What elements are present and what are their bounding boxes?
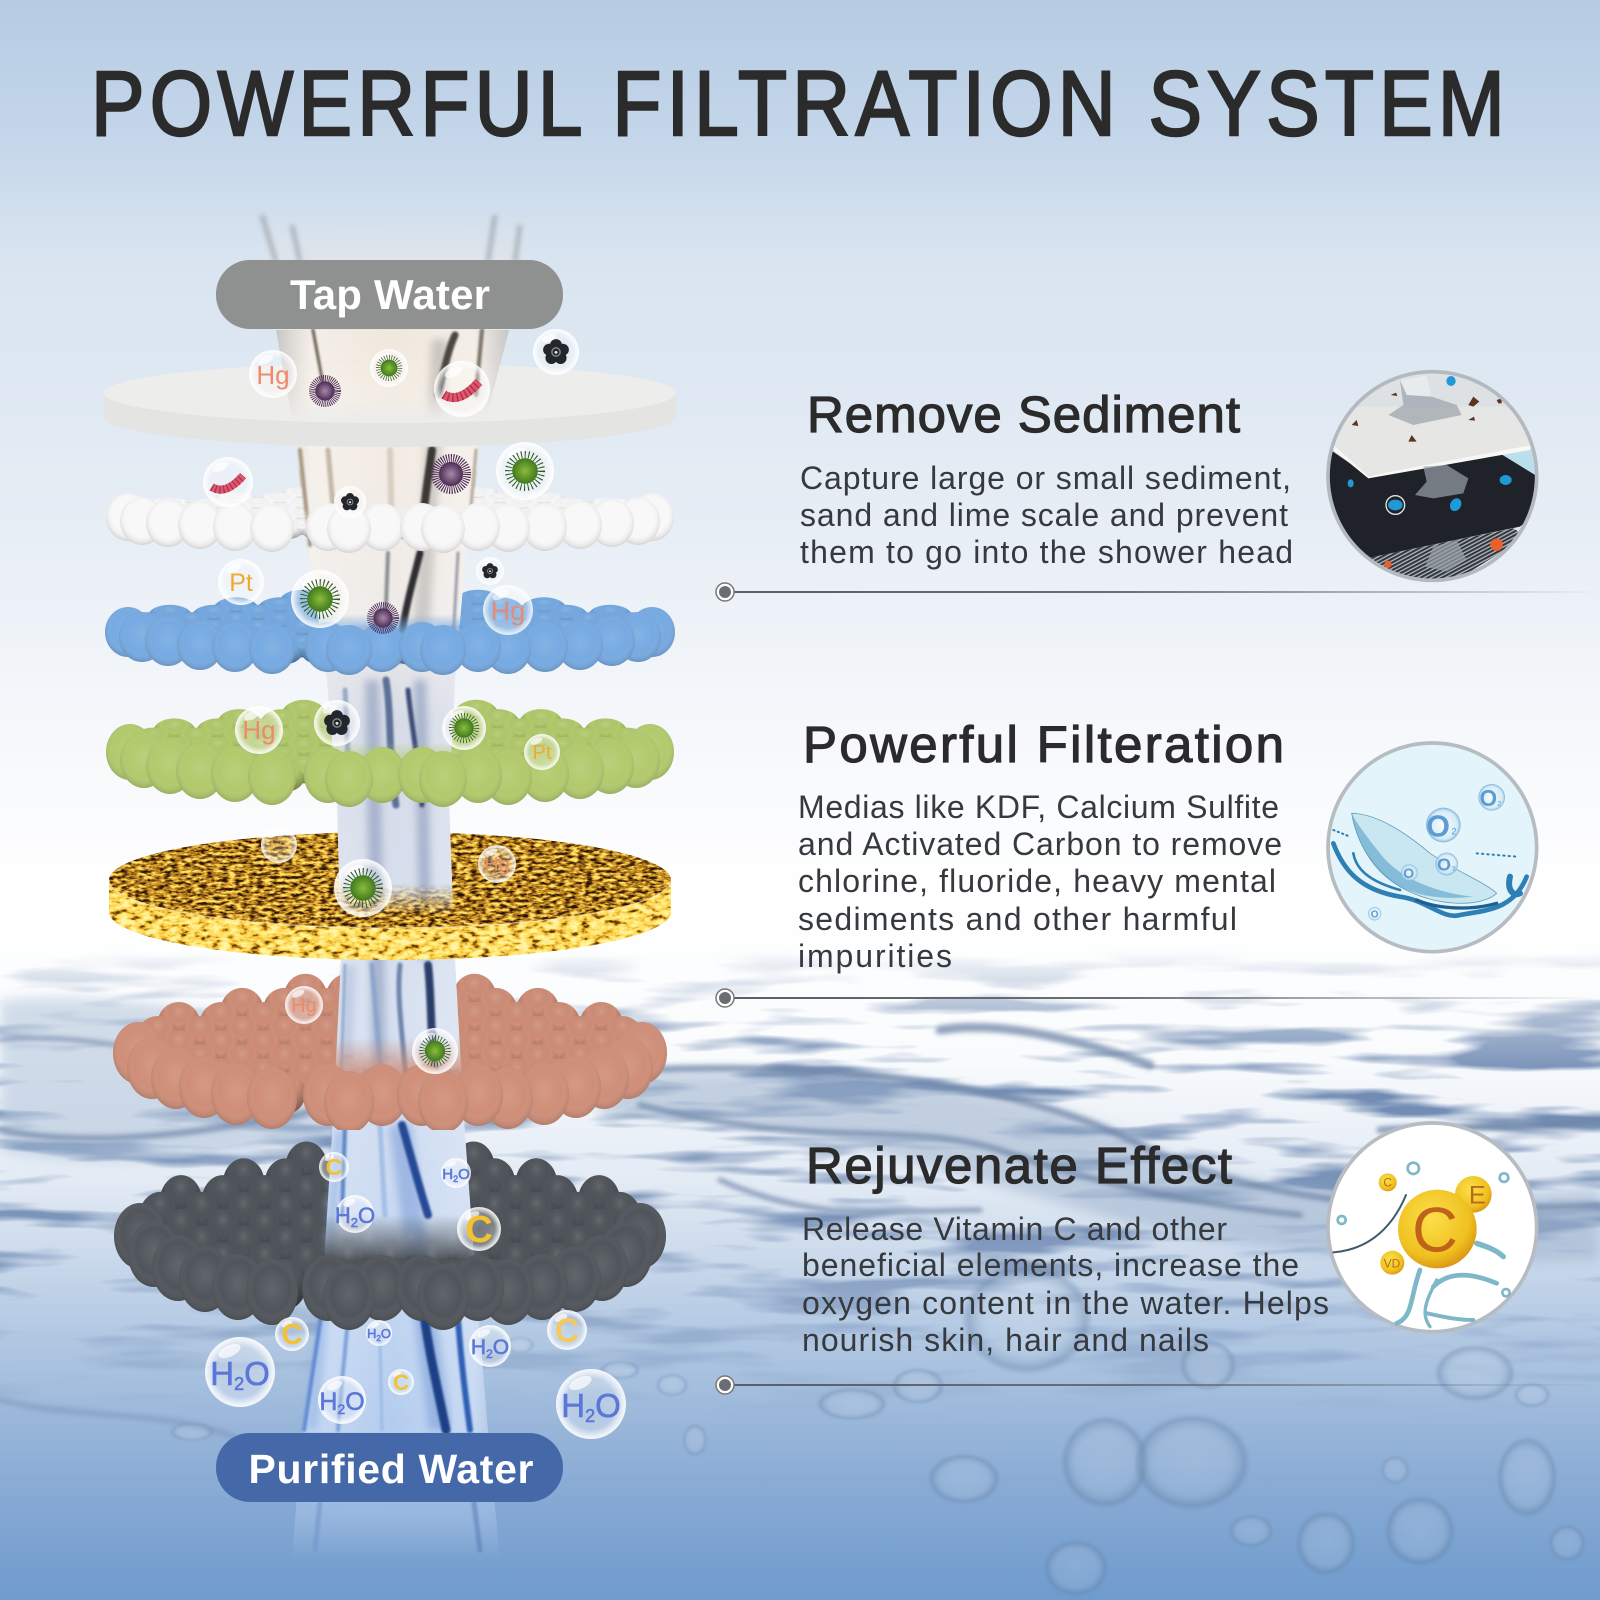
- icon: contact lens with oxygen bubbles: [1328, 743, 1537, 952]
- mineral and water molecule bubbles: 2: [376, 1334, 381, 1343]
- panel: rejuvenate effect: [716, 1123, 1600, 1394]
- mineral and water molecule bubbles: H: [561, 1387, 585, 1424]
- mineral and water molecule bubbles: 2: [337, 1401, 345, 1417]
- contaminant bubbles: Hg: [242, 715, 276, 745]
- mineral and water molecule bubbles: O: [345, 1388, 365, 1416]
- text block: powerful filteration description: [798, 789, 1282, 974]
- water stream: [262, 215, 530, 1560]
- label: purified water: [216, 1433, 563, 1502]
- mineral and water molecule bubbles: O: [381, 1326, 391, 1341]
- contaminant bubbles: [203, 329, 579, 1074]
- text block: remove sediment description: them to go into the shower head: [800, 534, 1293, 570]
- mineral and water molecule bubbles: 2: [351, 1215, 358, 1230]
- heading: rejuvenate effect: Rejuvenate Effect: [806, 1137, 1232, 1194]
- divider with marker: [716, 583, 1600, 601]
- heading: remove sediment: Remove Sediment: [807, 386, 1240, 443]
- water surface waves and bubbles: [0, 950, 1600, 1596]
- icon: contact lens with oxygen bubbles: O: [1437, 855, 1451, 875]
- filter layer 3: blue beads: [105, 215, 675, 1560]
- contaminant bubbles: Hg: [491, 596, 525, 626]
- panel: remove sediment: [716, 370, 1600, 601]
- mineral and water molecule bubbles: H: [442, 1166, 453, 1183]
- contaminant bubbles: Pt: [229, 569, 253, 597]
- mineral and water molecule bubbles: 2: [453, 1174, 458, 1184]
- contaminant bubbles: Pt: [533, 742, 552, 764]
- filter layer 1: white cotton disc: [104, 215, 676, 1560]
- label: tap water: [216, 260, 563, 329]
- heading: powerful filteration: Powerful Filteration: [803, 716, 1284, 773]
- icon: filter layers with sediment: [1327, 370, 1540, 590]
- mineral and water molecule bubbles: C: [555, 1312, 579, 1350]
- label: tap water: Tap Water: [290, 271, 490, 318]
- icon: contact lens with oxygen bubbles: 2: [1451, 826, 1457, 836]
- mineral and water molecule bubbles: O: [458, 1166, 470, 1183]
- icon: contact lens with oxygen bubbles: O: [1371, 909, 1379, 920]
- divider with marker: [716, 1376, 1600, 1394]
- filter layer 2: white beads: [106, 215, 674, 1560]
- text block: rejuvenate effect description: beneficial elements, increase the: [802, 1247, 1299, 1283]
- text block: rejuvenate effect description: oxygen content in the water. Helps: [802, 1285, 1329, 1321]
- divider with marker: [716, 989, 1600, 1007]
- icon: contact lens with oxygen bubbles: 2: [1497, 799, 1501, 808]
- contaminant bubbles: Pt: [270, 835, 289, 857]
- text block: remove sediment description: Capture large or small sediment,: [800, 460, 1291, 496]
- mineral and water molecule bubbles: O: [358, 1203, 375, 1228]
- contaminant bubbles: Hg: [256, 360, 290, 390]
- icon: contact lens with oxygen bubbles: O: [1403, 865, 1414, 881]
- mineral and water molecule bubbles: H: [319, 1388, 337, 1416]
- mineral and water molecule bubbles: C: [465, 1209, 493, 1251]
- mineral and water molecule bubbles: C: [282, 1319, 303, 1351]
- mineral and water molecule bubbles: H: [367, 1326, 376, 1341]
- mineral and water molecule bubbles: 2: [585, 1406, 595, 1426]
- text block: rejuvenate effect description: Release Vitamin C and other: [802, 1211, 1227, 1247]
- mineral and water molecule bubbles: O: [244, 1355, 270, 1392]
- filter layer 4: green beads: [106, 215, 674, 1560]
- mineral and water molecule bubbles: O: [493, 1336, 509, 1359]
- filter layer 5: gold KDF disc: [109, 215, 671, 1560]
- filter layer 6: terracotta beads: [113, 215, 667, 1560]
- mineral and water molecule bubbles: H: [210, 1355, 234, 1392]
- mineral and water molecule bubbles: O: [595, 1387, 621, 1424]
- text block: rejuvenate effect description: nourish skin, hair and nails: [802, 1322, 1209, 1358]
- icon: vitamin spheres: [1328, 1123, 1537, 1332]
- mineral and water molecule bubbles: H: [471, 1336, 486, 1359]
- icon: vitamin spheres: E: [1469, 1181, 1486, 1209]
- text block: powerful filteration description: impurities: [798, 938, 952, 974]
- mineral and water molecule bubbles: H: [335, 1203, 351, 1228]
- icon: vitamin spheres: C: [1383, 1176, 1392, 1190]
- text block: powerful filteration description: Medias like KDF, Calcium Sulfite: [798, 789, 1279, 825]
- icon: contact lens with oxygen bubbles: O: [1426, 810, 1450, 844]
- contaminant bubbles: Hg: [484, 854, 510, 876]
- mineral and water molecule bubbles: C: [393, 1370, 409, 1395]
- icon: vitamin spheres: VD: [1384, 1257, 1401, 1271]
- label: purified water: Purified Water: [248, 1446, 534, 1492]
- text block: rejuvenate effect description: [802, 1211, 1329, 1358]
- text block: powerful filteration description: and Activated Carbon to remove: [798, 826, 1282, 862]
- mineral and water molecule bubbles: 2: [234, 1374, 244, 1394]
- text block: remove sediment description: [800, 460, 1293, 570]
- panel: powerful filteration: [716, 716, 1600, 1007]
- mineral and water molecule bubbles: C: [326, 1154, 342, 1180]
- text block: remove sediment description: sand and lime scale and prevent: [800, 497, 1288, 533]
- filter layer 7: dark carbon beads: [114, 215, 666, 1560]
- text block: powerful filteration description: sediments and other harmful: [798, 901, 1237, 937]
- mineral and water molecule bubbles: [205, 1152, 626, 1439]
- icon: contact lens with oxygen bubbles: 2: [1452, 867, 1456, 873]
- mineral and water molecule bubbles: 2: [486, 1347, 493, 1361]
- text block: powerful filteration description: chlorine, fluoride, heavy mental: [798, 863, 1276, 899]
- icon: contact lens with oxygen bubbles: O: [1480, 785, 1497, 811]
- icon: vitamin spheres: C: [1412, 1196, 1458, 1266]
- contaminant bubbles: Hg: [291, 995, 317, 1017]
